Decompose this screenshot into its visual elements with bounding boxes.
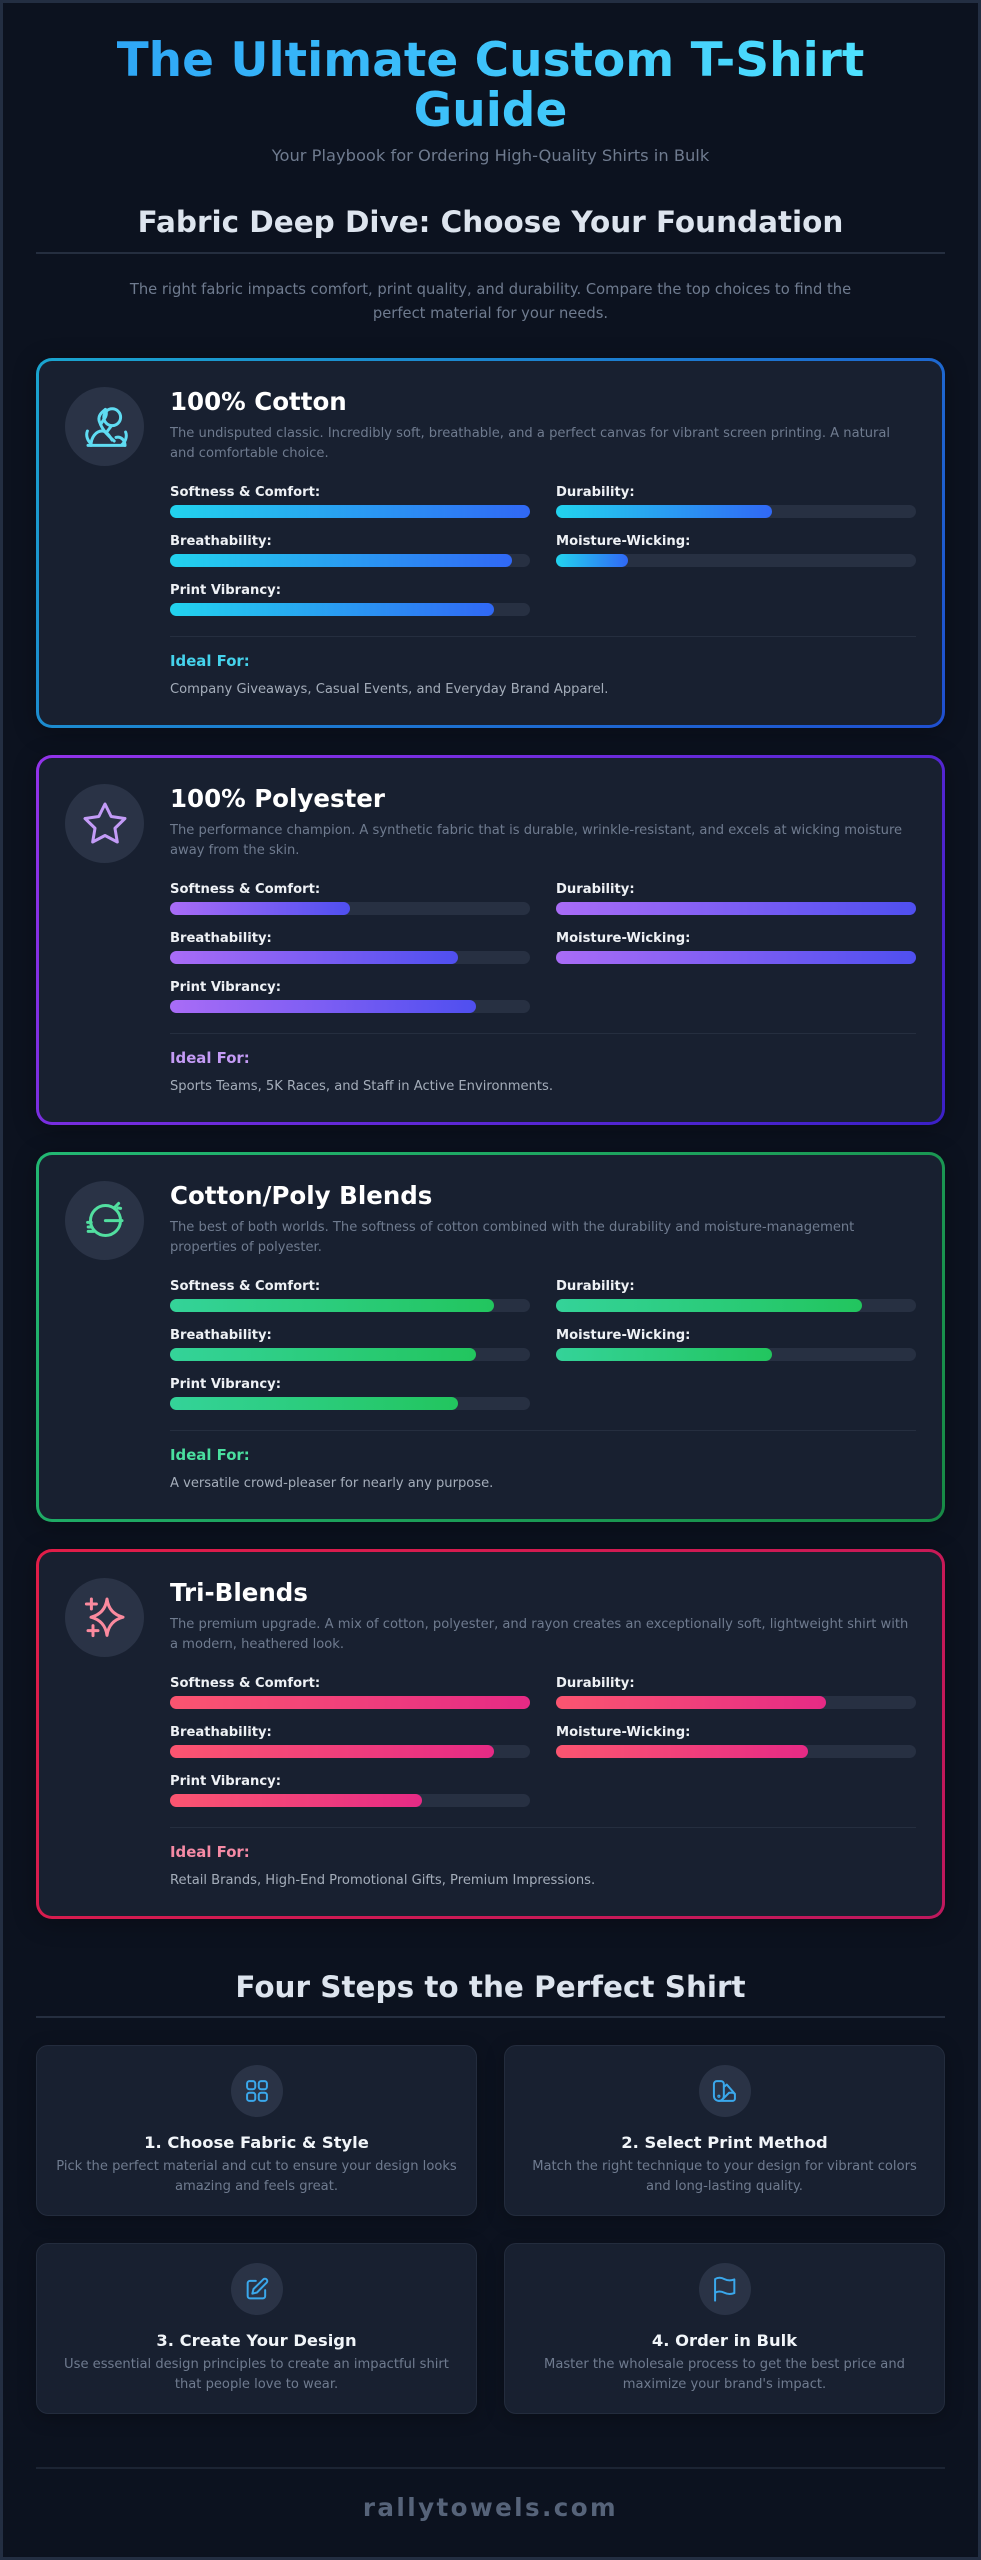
fabric description <box>170 1220 854 1255</box>
stat: softness: Softness & Comfort: <box>170 1676 320 1691</box>
fabric description: The undisputed classic. Incredibly soft, breathable, and a perfect canvas for vibrant screen printing. A natural <box>170 426 890 441</box>
icon: sparkles <box>65 1578 144 1657</box>
stat: moisture-wicking <box>556 1725 916 1758</box>
intro text: The right fabric impacts comfort, print quality, and durability. Compare the top choices to find the <box>130 281 851 298</box>
fabric name: Tri-Blends <box>170 1578 308 1607</box>
stat: softness <box>170 1279 530 1312</box>
stat: moisture-wicking <box>556 534 916 567</box>
ideal for text: Company Giveaways, Casual Events, and Everyday Brand Apparel. <box>170 682 608 697</box>
stat: print vibrancy: Print Vibrancy: <box>170 1774 281 1789</box>
stat: durability: Durability: <box>556 1676 635 1691</box>
stat: softness: Softness & Comfort: <box>170 1279 320 1294</box>
fabric description <box>170 823 902 858</box>
panel: 100% cotton <box>36 358 945 728</box>
step description <box>532 2159 917 2194</box>
step title: 4. Order in Bulk <box>652 2331 797 2350</box>
stat: breathability <box>170 1725 530 1758</box>
step title: 3. Create Your Design <box>156 2331 357 2350</box>
heading: fabric deep dive: Fabric Deep Dive: Choose Your Foundation <box>138 205 843 239</box>
stat: breathability: Breathability: <box>170 1328 272 1343</box>
panel: cotton/poly blends <box>36 1152 945 1522</box>
fabric name: Cotton/Poly Blends <box>170 1181 432 1210</box>
icon: star <box>65 784 144 863</box>
stat: print vibrancy <box>170 1774 530 1807</box>
ideal for label: Ideal For: <box>170 1049 250 1067</box>
stat: print vibrancy: Print Vibrancy: <box>170 1377 281 1392</box>
stat: moisture-wicking: Moisture-Wicking: <box>556 1725 690 1740</box>
ideal for text: Retail Brands, High-End Promotional Gifts, Premium Impressions. <box>170 1873 595 1888</box>
fabric description: properties of polyester. <box>170 1240 322 1255</box>
stat: print vibrancy <box>170 583 530 616</box>
stat: softness <box>170 1676 530 1709</box>
stat: softness: Softness & Comfort: <box>170 882 320 897</box>
stat: moisture-wicking: Moisture-Wicking: <box>556 1328 690 1343</box>
ideal for label: Ideal For: <box>170 1843 250 1861</box>
fabric description <box>170 426 890 461</box>
step title: 1. Choose Fabric & Style <box>144 2133 369 2152</box>
step description: that people love to wear. <box>175 2377 338 2392</box>
title: The Ultimate Custom T-Shirt <box>117 33 864 88</box>
step description: Master the wholesale process to get the best price and <box>544 2357 905 2372</box>
icon: grid <box>231 2065 283 2117</box>
step 3 card <box>36 2243 477 2414</box>
stat: breathability: Breathability: <box>170 534 272 549</box>
stat: durability: Durability: <box>556 1279 635 1294</box>
stat: print vibrancy: Print Vibrancy: <box>170 980 281 995</box>
fabric description: The premium upgrade. A mix of cotton, polyester, and rayon creates an exceptionally soft, lightweight shirt with <box>170 1617 908 1632</box>
ideal for text: A versatile crowd-pleaser for nearly any purpose. <box>170 1476 493 1491</box>
fabric description: The performance champion. A synthetic fabric that is durable, wrinkle-resistant, and excels at wicking moisture <box>170 823 902 838</box>
ideal for label: Ideal For: <box>170 1446 250 1464</box>
ideal for text: Sports Teams, 5K Races, and Staff in Active Environments. <box>170 1079 553 1094</box>
step description: Use essential design principles to create an impactful shirt <box>64 2357 449 2372</box>
stat: breathability <box>170 931 530 964</box>
stat: durability <box>556 1279 916 1312</box>
step 4 card <box>504 2243 945 2414</box>
step 2 card <box>504 2045 945 2216</box>
heading: four steps: Four Steps to the Perfect Shirt <box>235 1970 746 2004</box>
fabric name: 100% Cotton <box>170 387 347 416</box>
stat: durability <box>556 1676 916 1709</box>
stat: breathability: Breathability: <box>170 931 272 946</box>
title: Guide <box>414 83 567 138</box>
step description: amazing and feels great. <box>175 2179 338 2194</box>
stat: breathability <box>170 534 530 567</box>
footer brand: rallytowels.com <box>363 2493 618 2522</box>
icon: swatch <box>699 2065 751 2117</box>
step description <box>544 2357 905 2392</box>
stat: moisture-wicking <box>556 1328 916 1361</box>
stat: print vibrancy <box>170 1377 530 1410</box>
panel: tri-blends <box>36 1549 945 1919</box>
stat: durability: Durability: <box>556 882 635 897</box>
intro text: perfect material for your needs. <box>373 304 608 322</box>
stat: softness <box>170 485 530 518</box>
step description <box>64 2357 449 2392</box>
fabric description: a modern, heathered look. <box>170 1637 344 1652</box>
stat: print vibrancy <box>170 980 530 1013</box>
fabric description: The best of both worlds. The softness of cotton combined with the durability and moisture-management <box>170 1220 854 1235</box>
stat: breathability: Breathability: <box>170 1725 272 1740</box>
step description: Match the right technique to your design for vibrant colors <box>532 2159 917 2174</box>
icon: blend cycle <box>65 1181 144 1260</box>
step description: and long-lasting quality. <box>646 2179 803 2194</box>
fabric description: and comfortable choice. <box>170 446 329 461</box>
fabric name: 100% Polyester <box>170 784 385 813</box>
icon: cotton plant <box>65 387 144 466</box>
icon: pencil square <box>231 2263 283 2315</box>
intro text <box>130 281 851 322</box>
stat: durability <box>556 485 916 518</box>
ideal for label: Ideal For: <box>170 652 250 670</box>
stat: softness: Softness & Comfort: <box>170 485 320 500</box>
stat: breathability <box>170 1328 530 1361</box>
panel: 100% polyester <box>36 755 945 1125</box>
step description: Pick the perfect material and cut to ensure your design looks <box>56 2159 457 2174</box>
fabric description: away from the skin. <box>170 843 299 858</box>
step title: 2. Select Print Method <box>621 2133 828 2152</box>
icon: flag <box>699 2263 751 2315</box>
stat: durability: Durability: <box>556 485 635 500</box>
stat: print vibrancy: Print Vibrancy: <box>170 583 281 598</box>
step description: maximize your brand's impact. <box>623 2377 826 2392</box>
stat: durability <box>556 882 916 915</box>
step description <box>56 2159 457 2194</box>
fabric description <box>170 1617 908 1652</box>
stat: moisture-wicking: Moisture-Wicking: <box>556 931 690 946</box>
stat: moisture-wicking: Moisture-Wicking: <box>556 534 690 549</box>
stat: softness <box>170 882 530 915</box>
step 1 card <box>36 2045 477 2216</box>
subtitle: Your Playbook for Ordering High-Quality Shirts in Bulk <box>272 146 709 165</box>
stat: moisture-wicking <box>556 931 916 964</box>
title <box>117 33 864 138</box>
